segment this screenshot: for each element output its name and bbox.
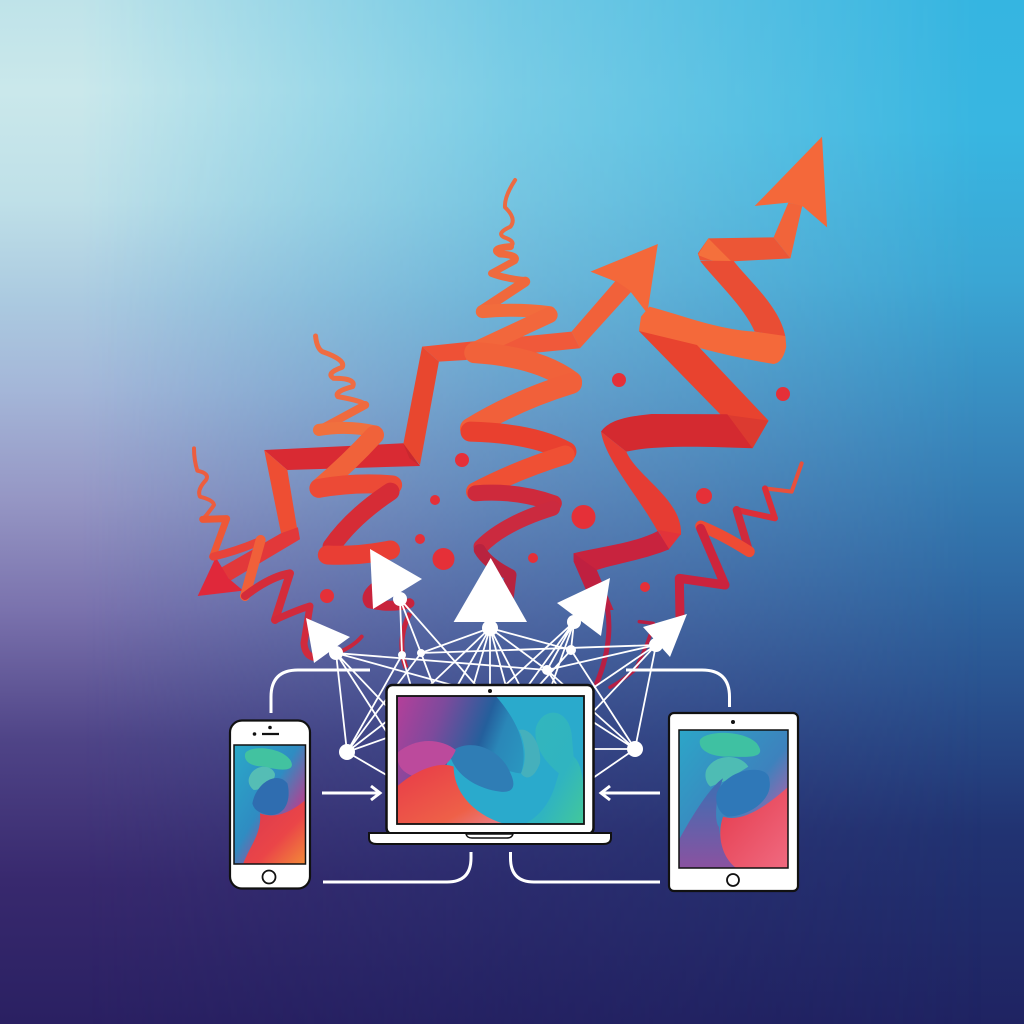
red dots [320,373,790,603]
ribbon arrow: largest rising ribbon [574,137,827,610]
white arrowheads [306,549,687,663]
ribbon spring: far left [194,448,362,657]
laptop notch [466,834,513,838]
laptop screen [397,696,584,824]
network nodes [329,592,663,760]
ribbon spring: second from left [316,336,409,606]
laptop base [369,833,611,844]
connector: phone to laptop top [271,670,370,713]
ribbon spring: far right [597,463,802,687]
phone screen [234,745,306,864]
tablet [669,713,798,891]
ribbon stub under network [402,613,410,668]
arrow: phone to laptop [322,786,380,800]
phone sensors [253,726,272,736]
phone speaker [262,733,279,735]
ribbon arrow: middle rising zigzag [198,244,658,596]
connector: tablet to laptop bottom [510,852,660,882]
phone [230,720,310,888]
network lines [336,599,656,780]
phone home button [262,870,276,884]
connector: tablet to laptop top [626,670,730,707]
tablet home button [727,874,739,886]
tablet screen [679,730,788,868]
laptop [369,685,611,844]
ribbon spring: centre [470,180,572,610]
tablet camera [731,720,735,724]
laptop camera [488,689,492,693]
connector: phone to laptop bottom [323,852,471,882]
arrow: tablet to laptop [601,786,660,800]
